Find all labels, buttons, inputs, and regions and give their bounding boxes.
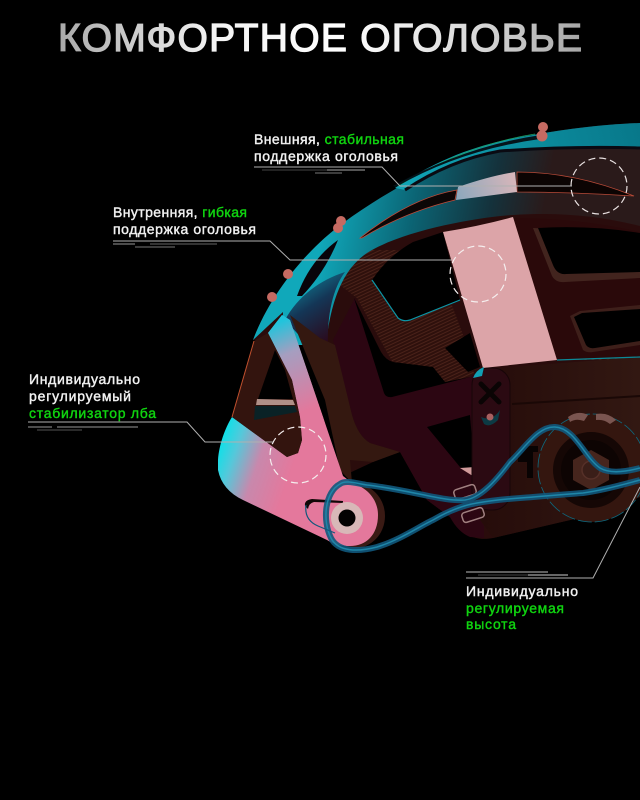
tail shadow xyxy=(325,484,385,548)
callout: inner support xyxy=(113,204,452,260)
dark clip xyxy=(518,446,538,478)
dark arc xyxy=(405,147,640,190)
mesh frame xyxy=(340,220,640,382)
dashed circle: outer support xyxy=(571,158,627,214)
dark maroon behind mesh right xyxy=(512,218,640,360)
pink strap xyxy=(443,217,557,368)
outer band xyxy=(395,123,640,190)
label text: Внешняя, стабильная xyxy=(254,131,404,147)
window light strip xyxy=(256,399,295,405)
green edge xyxy=(398,134,535,186)
purple fade xyxy=(285,272,345,345)
label text: регулируемая xyxy=(466,600,564,616)
slot: side xyxy=(297,240,338,296)
leader line xyxy=(28,422,273,442)
title: КОМФОРТНОЕ ОГОЛОВЬЕ xyxy=(58,17,582,60)
ear slit xyxy=(305,499,343,509)
window edge teal xyxy=(372,280,460,321)
shell base xyxy=(253,123,640,539)
label text: Внутренняя, гибкая xyxy=(113,204,247,220)
dashed circle: inner support xyxy=(450,246,506,302)
knob xyxy=(538,413,640,522)
rear panel xyxy=(473,357,640,538)
leader line xyxy=(466,487,640,578)
window: upper left mesh xyxy=(372,232,460,321)
small body window xyxy=(427,415,475,477)
eyelet hole xyxy=(338,510,356,526)
label text: Индивидуально xyxy=(29,371,140,387)
bracket xyxy=(472,367,510,510)
window shadow xyxy=(254,406,297,420)
callout: forehead stabilizer xyxy=(28,371,273,442)
window: upper right xyxy=(538,227,640,274)
panel seam xyxy=(512,396,640,404)
leader line xyxy=(113,241,452,260)
callout: height adjustment xyxy=(466,487,640,632)
strap slots xyxy=(453,484,485,523)
teal panel edge xyxy=(557,357,640,360)
front arch highlight xyxy=(268,315,330,440)
window: right lower lip xyxy=(570,305,640,352)
small window pink xyxy=(460,467,476,478)
brown rim beside front piece xyxy=(290,315,400,483)
eyelet xyxy=(331,502,363,534)
leader line xyxy=(254,167,572,186)
front window orange edge xyxy=(232,341,254,417)
label text: Индивидуально xyxy=(466,583,578,599)
window: lower left xyxy=(354,298,470,397)
front window frame xyxy=(232,333,302,457)
label text: поддержка оголовья xyxy=(113,221,256,237)
anchor beads xyxy=(267,122,548,302)
dashed circle: forehead stabilizer xyxy=(270,427,326,483)
label text: поддержка оголовья xyxy=(254,148,398,164)
window: small triangle xyxy=(445,333,480,372)
window: right lower xyxy=(574,309,640,348)
teal top band xyxy=(253,123,640,345)
slot: upper band xyxy=(360,190,457,238)
cable xyxy=(306,427,640,550)
callout: outer support xyxy=(254,131,572,186)
window: upper right lip xyxy=(533,228,640,282)
front pink piece xyxy=(218,315,378,546)
maroon lower body xyxy=(333,298,484,538)
label text: высота xyxy=(466,616,516,632)
label text: стабилизатор лба xyxy=(29,405,156,421)
label text: регулируемый xyxy=(29,388,131,404)
slot: outer long xyxy=(393,135,541,187)
upper strap patch xyxy=(456,172,517,200)
slot: right band xyxy=(517,172,634,196)
helmet illustration xyxy=(218,122,640,550)
front window black top xyxy=(258,350,293,399)
